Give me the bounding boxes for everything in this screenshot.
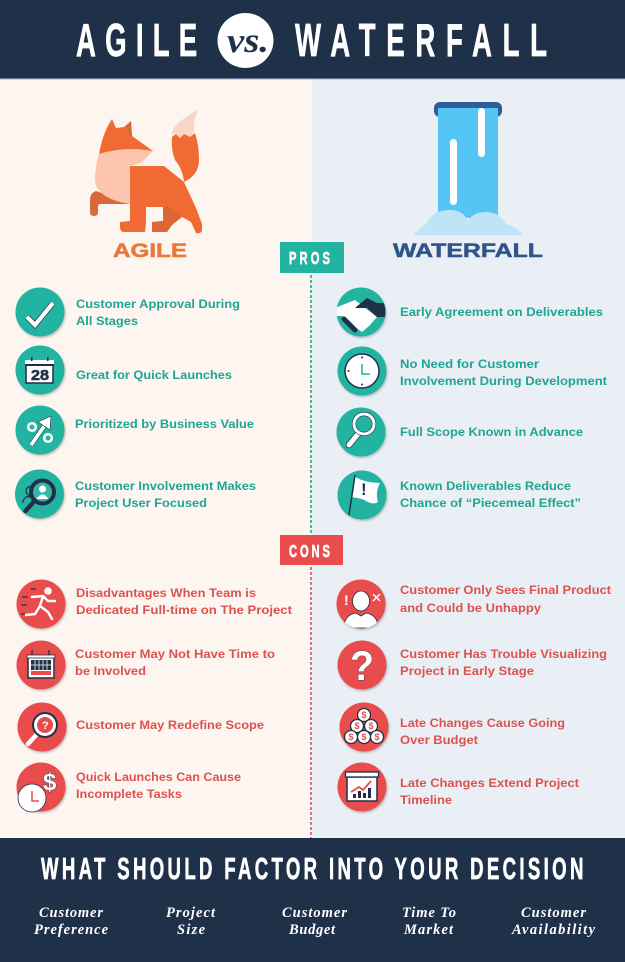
- icon: coins pile: $: [361, 710, 367, 720]
- factor: customer availability: [511, 905, 596, 938]
- pro: quick launches: [16, 346, 232, 396]
- con: trouble visualizing: [338, 640, 607, 691]
- factor: time to market: Market: [403, 922, 454, 938]
- label: pros: PROS: [289, 248, 330, 269]
- con: customer time: be Involved: [75, 664, 146, 678]
- factor: project size: Project: [166, 905, 216, 921]
- factor: time to market: [402, 905, 456, 938]
- con: trouble visualizing: Customer Has Trouble Visualizing: [400, 647, 607, 661]
- factor: customer budget: [282, 905, 347, 938]
- pro: user focused: Project User Focused: [75, 496, 207, 510]
- pro: prioritized by value: Prioritized by Business Value: [75, 417, 254, 431]
- con: incomplete tasks: Quick Launches Can Cause: [76, 770, 241, 784]
- pro: no customer involvement: [338, 346, 607, 397]
- con: extended timeline: Late Changes Extend Project: [400, 776, 579, 790]
- icon: unhappy customer: !: [344, 592, 349, 608]
- con: team dedicated: Disadvantages When Team is: [76, 586, 256, 600]
- icon: agile fox: [90, 110, 202, 233]
- icon: coins pile: $: [348, 732, 354, 742]
- title banner: [0, 0, 625, 80]
- pro: customer approval: [16, 288, 240, 338]
- factor: customer availability: Availability: [511, 922, 596, 938]
- title banner: WATERFALL: [295, 16, 547, 67]
- pro: known deliverables: Chance of “Piecemeal Effect”: [400, 496, 581, 510]
- con: incomplete tasks: [16, 762, 241, 813]
- factor: customer preference: [34, 905, 109, 938]
- con: extended timeline: [338, 762, 579, 813]
- icon: unhappy customer: [336, 580, 386, 630]
- con: incomplete tasks: Incomplete Tasks: [76, 787, 182, 801]
- factor: customer availability: Customer: [521, 905, 586, 921]
- icon: clock and dollar: [16, 762, 66, 813]
- factor: time to market: Time To: [402, 905, 456, 921]
- heading: agile: AGILE: [113, 240, 187, 262]
- label: cons: [280, 535, 343, 565]
- pro: known deliverables: [338, 470, 581, 521]
- icon: calendar 28: [16, 346, 66, 396]
- icon: question mark: [338, 640, 388, 691]
- icon: magnifier question: [18, 702, 68, 753]
- pro: early agreement: Early Agreement on Deliverables: [400, 305, 603, 319]
- icon: search users: [15, 470, 65, 520]
- icon: magnifier: [336, 408, 386, 458]
- icon: percent arrow: [16, 406, 66, 456]
- pro: no customer involvement: Involvement During Development: [400, 374, 607, 388]
- icon: coins pile: $: [361, 732, 367, 742]
- pro: customer approval: All Stages: [76, 314, 138, 328]
- panel: decision factors footer: [0, 838, 625, 962]
- con: redefine scope: [18, 702, 264, 753]
- dotted divider: cons: [310, 567, 312, 838]
- icon: check mark: [16, 288, 66, 338]
- con: extended timeline: Timeline: [400, 793, 452, 807]
- pro: prioritized by value: [16, 406, 254, 456]
- con: over budget: Over Budget: [400, 733, 478, 747]
- icon: coins pile: $: [374, 732, 380, 742]
- icon: runner: [16, 580, 66, 630]
- pro: known deliverables: Known Deliverables Reduce: [400, 479, 571, 493]
- heading: what should factor: WHAT SHOULD FACTOR INTO YOUR DECISION: [41, 852, 583, 886]
- label: pros: [280, 242, 344, 273]
- pro: customer approval: Customer Approval During: [76, 297, 240, 311]
- factor: project size: [166, 905, 216, 938]
- icon: calendar grid: [16, 640, 66, 691]
- factor: customer budget: Budget: [288, 922, 336, 938]
- con: final product: Customer Only Sees Final Product: [400, 583, 611, 597]
- factor: project size: Size: [177, 922, 206, 938]
- factor: customer preference: Preference: [34, 922, 109, 938]
- icon: question mark: ?: [350, 642, 374, 689]
- heading: waterfall: WATERFALL: [393, 240, 543, 262]
- title banner: vs.: [227, 21, 269, 60]
- panel: agile background: [0, 79, 312, 839]
- con: team dedicated: [16, 580, 292, 630]
- dotted divider: pros: [310, 275, 312, 535]
- con: final product: [336, 580, 611, 630]
- icon: coins pile: [340, 702, 390, 753]
- label: cons: CONS: [289, 541, 330, 562]
- con: over budget: Late Changes Cause Going: [400, 716, 565, 730]
- icon: presentation chart: [338, 762, 388, 813]
- title banner: AGILE: [76, 16, 197, 67]
- icon: handshake: [335, 288, 387, 338]
- con: team dedicated: Dedicated Full-time on The Project: [76, 603, 292, 617]
- icon: coins pile: $: [368, 721, 374, 731]
- pro: user focused: Customer Involvement Makes: [75, 479, 256, 493]
- con: final product: and Could be Unhappy: [400, 601, 541, 615]
- icon: flag: !: [361, 480, 367, 499]
- icon: coins pile: $: [354, 721, 360, 731]
- factor: customer preference: Customer: [39, 905, 103, 921]
- icon: clock: [338, 346, 388, 397]
- pro: full scope: [336, 408, 583, 458]
- con: redefine scope: Customer May Redefine Scope: [76, 718, 264, 732]
- icon: calendar 28: 28: [31, 367, 49, 384]
- pro: no customer involvement: No Need for Customer: [400, 357, 539, 371]
- icon: flag: [338, 470, 388, 521]
- pro: full scope: Full Scope Known in Advance: [400, 425, 583, 439]
- con: customer time: [16, 640, 275, 691]
- con: customer time: Customer May Not Have Time to: [75, 647, 275, 661]
- con: trouble visualizing: Project in Early Stage: [400, 664, 534, 678]
- panel: waterfall background: [312, 79, 625, 839]
- con: over budget: [340, 702, 565, 753]
- icon: magnifier question: ?: [42, 720, 49, 732]
- pro: user focused: [15, 470, 256, 520]
- pro: early agreement: [335, 288, 603, 338]
- factor: customer budget: Customer: [282, 905, 347, 921]
- pro: quick launches: Great for Quick Launches: [76, 368, 232, 382]
- icon: clock and dollar: $: [43, 769, 57, 796]
- icon: waterfall: [413, 102, 523, 235]
